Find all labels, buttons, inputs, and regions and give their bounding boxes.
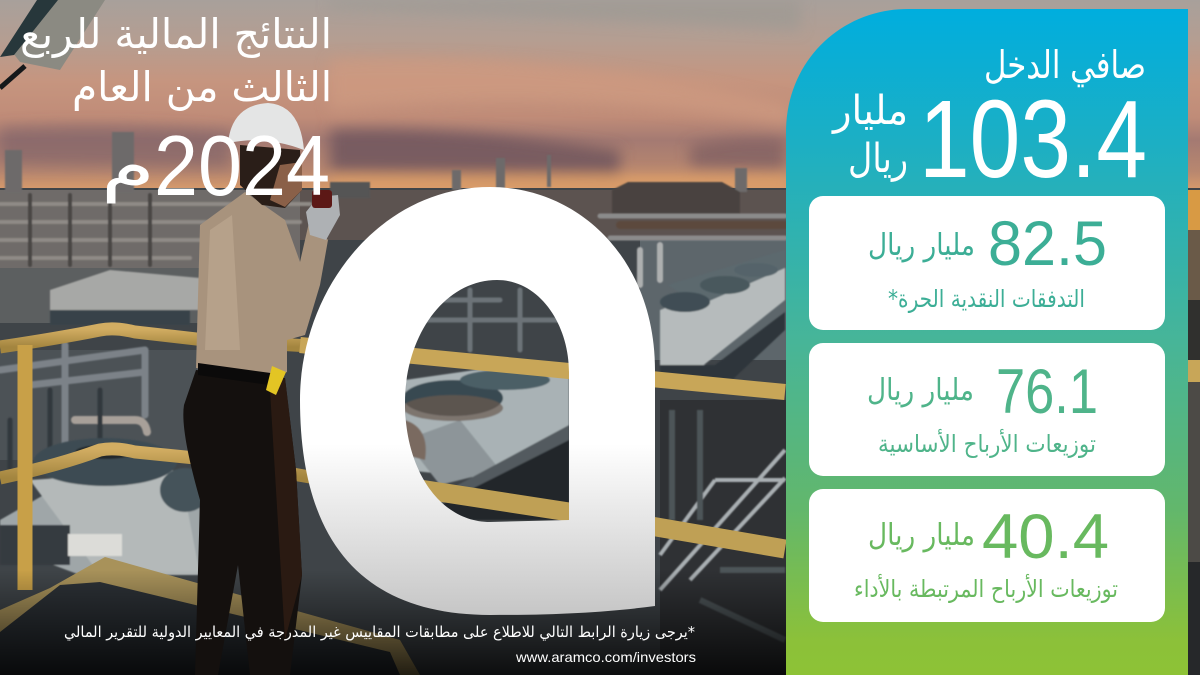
big white letter logo mark [300, 187, 655, 615]
unit: مليار ريال [868, 518, 975, 553]
value: 82.5 [988, 209, 1107, 279]
value: 40.4 [982, 502, 1109, 572]
right panel [786, 9, 1188, 675]
card: free cash flow [809, 196, 1165, 330]
unit: billion: مليار [831, 88, 908, 134]
caption: توزيعات الأرباح المرتبطة بالأداء [854, 574, 1118, 603]
value: 76.1 [996, 357, 1098, 427]
footnote text: *يرجى زيارة الرابط التالي للاطلاع على مطابقات المقاييس غير المدرجة في المعايير الدولية للتقرير المالي [64, 623, 695, 642]
title line 2: الثالث من العام [72, 63, 332, 111]
headline figure: 103.4: 103.4 [919, 78, 1147, 201]
strip right of the panel [1188, 190, 1200, 675]
title [20, 10, 332, 214]
card: performance-linked dividends [809, 489, 1165, 622]
distant towers [5, 132, 747, 214]
trousers [183, 370, 302, 675]
unit: مليار ريال [868, 228, 975, 263]
unit: riyal: ريال [848, 136, 908, 182]
year: 2024 [154, 119, 330, 214]
pipe racks [0, 195, 785, 470]
refinery mass [0, 188, 1200, 675]
card: base dividends [809, 343, 1165, 476]
sky [0, 0, 1200, 195]
caption: توزيعات الأرباح الأساسية [878, 429, 1096, 458]
glove [306, 195, 340, 240]
yellow tag [266, 366, 286, 395]
hard hat [228, 103, 304, 150]
year suffix: م [101, 130, 155, 204]
footnote [64, 623, 696, 665]
platform and grating [0, 557, 420, 675]
shirt [196, 192, 328, 378]
caption: التدفقات النقدية الحرة* [888, 285, 1085, 313]
title line 1: النتائج المالية للربع [20, 10, 332, 58]
bottom shade [0, 570, 790, 675]
cooling units [0, 250, 785, 575]
worker [183, 103, 340, 675]
lamp in top-left corner [0, 0, 105, 88]
unit: مليار ريال [867, 373, 974, 408]
lower right steel stairs [660, 410, 785, 640]
belt [198, 363, 278, 386]
panel heading: net income: صافي الدخل [984, 43, 1146, 87]
head [240, 145, 302, 208]
website: www.aramco.com/investors [515, 649, 696, 665]
yellow railings [0, 329, 785, 590]
